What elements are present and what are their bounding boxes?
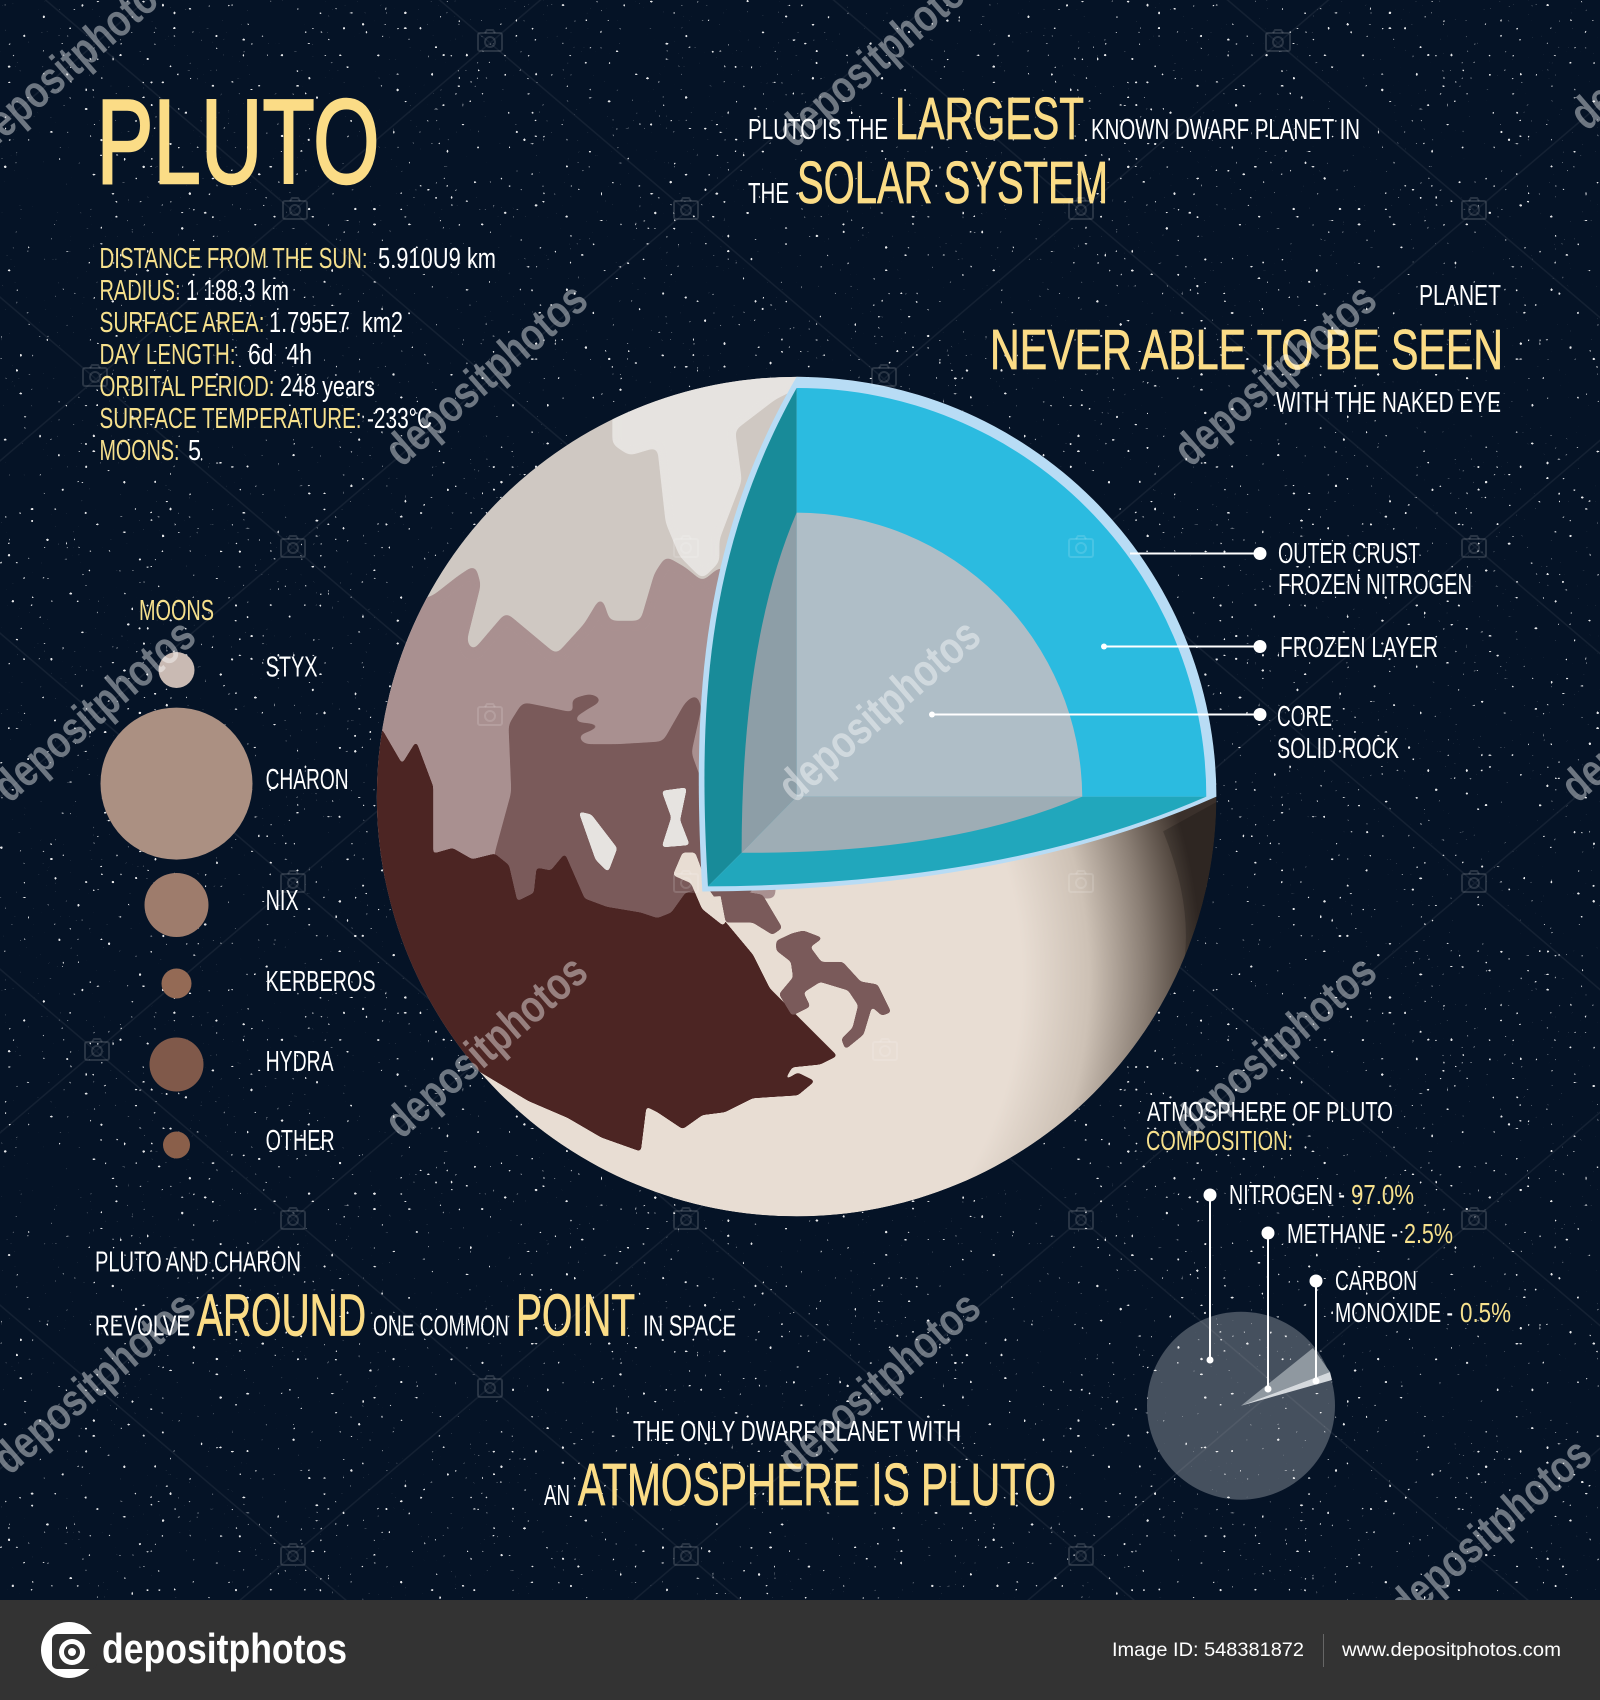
panel: moons	[100, 595, 376, 1158]
label: nitrogen: NITROGEN -	[1229, 1179, 1345, 1210]
heading: never able to be seen	[990, 280, 1503, 419]
callout: frozen layer	[1101, 632, 1438, 664]
text block: planet stats: 6d 4h	[248, 339, 312, 371]
moons heading: MOONS	[139, 595, 214, 627]
text block: planet stats	[100, 243, 496, 467]
icon: camera logo	[41, 1622, 97, 1678]
watermarks: depositphotos	[1163, 944, 1386, 1148]
callout: core: SOLID ROCK	[1277, 733, 1399, 765]
text block: planet stats: 248 years	[280, 371, 375, 403]
text block: planet stats: -233°C	[367, 403, 432, 435]
text block: only dwarf planet with atmosphere: THE ONLY DWARF PLANET WITH	[633, 1416, 961, 1448]
heading: never able to be seen: WITH THE NAKED EYE	[1276, 387, 1501, 419]
moon: charon: CHARON	[266, 764, 349, 796]
heading: largest known dwarf planet: KNOWN DWARF PLANET IN	[1091, 114, 1360, 146]
watermarks: depositphotos	[1163, 272, 1386, 476]
label: nitrogen	[1204, 1179, 1414, 1364]
planet cross-section	[376, 376, 1216, 1216]
watermark cameras	[83, 30, 1486, 1565]
moon: hydra: HYDRA	[266, 1046, 334, 1078]
text block: pluto and charon	[95, 1246, 736, 1348]
atmosphere heading: COMPOSITION:	[1146, 1125, 1293, 1156]
text block: planet stats: SURFACE TEMPERATURE:	[100, 403, 362, 435]
title: PLUTO	[96, 75, 380, 209]
label: carbon monoxide: 0.5%	[1460, 1297, 1511, 1328]
heading: largest known dwarf planet: LARGEST	[895, 86, 1084, 152]
frozen layer: bottom face	[708, 797, 1206, 886]
callout: frozen layer: FROZEN LAYER	[1280, 632, 1438, 664]
label: nitrogen: 97.0%	[1351, 1179, 1414, 1210]
core: left face	[742, 513, 797, 853]
text block: planet stats: MOONS:	[100, 435, 180, 467]
label: methane: METHANE -	[1287, 1218, 1398, 1249]
panel: atmosphere composition	[1146, 1096, 1511, 1500]
moon: other: OTHER	[266, 1125, 335, 1157]
text block: planet stats: 5	[188, 435, 201, 467]
atmosphere heading	[1146, 1096, 1393, 1156]
text block: planet stats: 1.795E7 km2	[269, 307, 403, 339]
text block: planet stats: SURFACE AREA:	[100, 307, 264, 339]
image id: Image ID: 548381872	[1112, 1640, 1304, 1661]
text block: pluto and charon: POINT	[516, 1282, 635, 1348]
atmosphere heading: ATMOSPHERE OF PLUTO	[1147, 1096, 1393, 1127]
text block: pluto and charon: ONE COMMON	[373, 1310, 509, 1342]
moon: styx	[158, 652, 318, 688]
callout: outer crust	[1130, 538, 1472, 601]
heading: largest known dwarf planet: SOLAR SYSTEM	[797, 150, 1108, 216]
text block: pluto and charon: PLUTO AND CHARON	[95, 1246, 301, 1278]
frozen layer: left face	[704, 388, 797, 886]
moon: charon	[100, 708, 349, 860]
cutaway outer crust	[699, 377, 1216, 891]
text block: pluto and charon: AROUND	[197, 1282, 366, 1348]
core: right face	[797, 513, 1082, 797]
label: methane: 2.5%	[1404, 1218, 1453, 1249]
text block: planet stats: 5.910U9 km	[378, 243, 496, 275]
text block: planet stats: DISTANCE FROM THE SUN:	[100, 243, 368, 275]
callout: core: CORE	[1277, 701, 1332, 733]
label: carbon monoxide	[1310, 1265, 1511, 1384]
pie chart	[1147, 1312, 1335, 1500]
callout: outer crust: FROZEN NITROGEN	[1278, 569, 1472, 601]
text block: pluto and charon: REVOLVE	[95, 1310, 190, 1342]
text block: planet stats: ORBITAL PERIOD:	[100, 371, 274, 403]
label: methane	[1262, 1218, 1453, 1392]
label: carbon monoxide: MONOXIDE -	[1335, 1297, 1453, 1328]
website: www.depositphotos.com	[1341, 1640, 1561, 1661]
planet surface	[376, 376, 1216, 1216]
watermarks: depositphotos	[374, 944, 597, 1148]
moon: kerberos	[162, 966, 376, 998]
moon: nix	[144, 873, 299, 937]
text block: only dwarf planet with atmosphere: AN	[544, 1480, 570, 1512]
text block: planet stats: 1 188.3 km	[186, 275, 289, 307]
heading: largest known dwarf planet: PLUTO IS THE	[748, 114, 888, 146]
watermarks: depositphotos	[767, 608, 990, 812]
text block: only dwarf planet with atmosphere	[544, 1416, 1056, 1518]
text block: pluto and charon: IN SPACE	[643, 1310, 736, 1342]
watermarks: depositphotos	[767, 1280, 990, 1484]
label: carbon monoxide: CARBON	[1335, 1265, 1417, 1296]
text block: only dwarf planet with atmosphere: ATMOSPHERE IS PLUTO	[578, 1452, 1056, 1518]
heading: largest known dwarf planet: THE	[748, 178, 789, 210]
core: bottom face	[742, 797, 1082, 853]
text block: planet stats: RADIUS:	[100, 275, 180, 307]
callout: core	[929, 701, 1399, 765]
text block: planet stats: DAY LENGTH:	[100, 339, 236, 371]
heading: largest known dwarf planet	[748, 86, 1360, 216]
frozen layer: right face	[797, 388, 1206, 797]
moon: other	[163, 1125, 335, 1158]
moon: kerberos: KERBEROS	[266, 966, 376, 998]
footer bar	[0, 1600, 1600, 1700]
moon: hydra	[150, 1038, 334, 1092]
moon: nix: NIX	[266, 885, 299, 917]
callout: outer crust: OUTER CRUST	[1278, 538, 1420, 570]
watermarks: depositphotos	[374, 272, 597, 476]
logo wordmark: depositphotos	[102, 1625, 347, 1672]
heading: never able to be seen: PLANET	[1419, 280, 1501, 312]
moon: styx: STYX	[266, 652, 318, 684]
